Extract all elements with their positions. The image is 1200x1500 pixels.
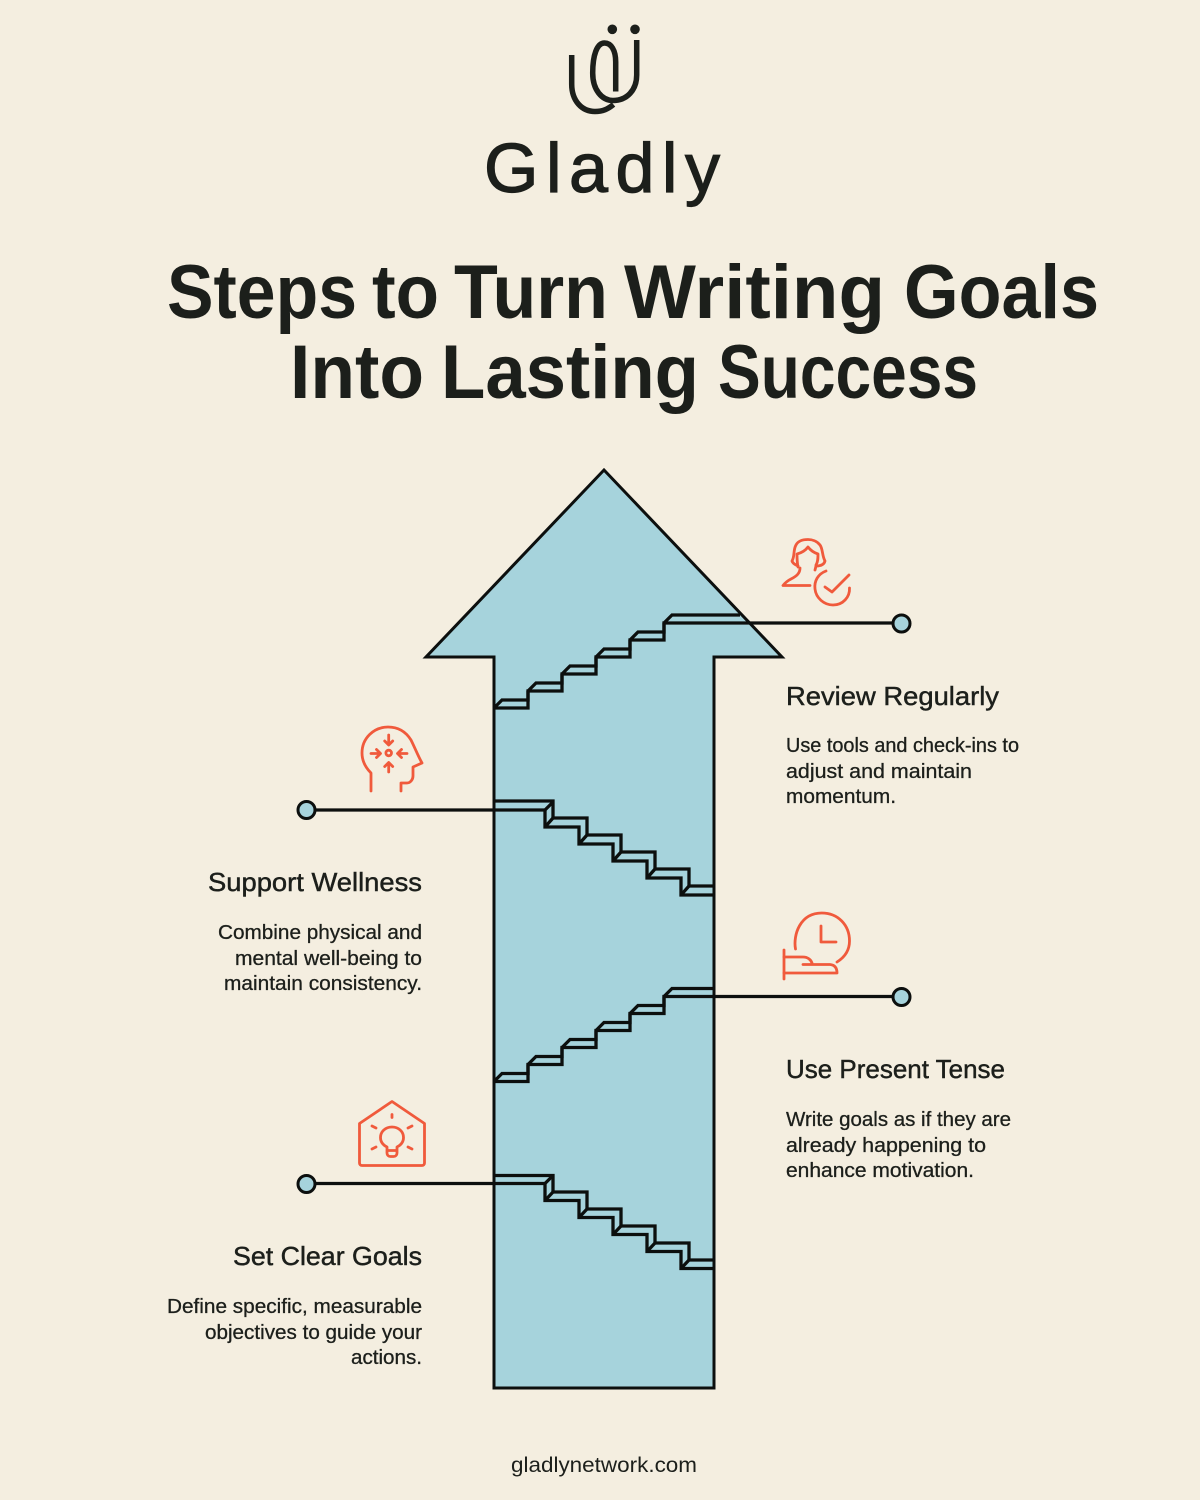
title: Into bbox=[290, 330, 424, 415]
heading: use present tense: Use Present Tense bbox=[786, 1054, 1005, 1084]
icon: house with light bulb bbox=[360, 1102, 424, 1166]
heading: set clear goals: Set Clear Goals bbox=[233, 1241, 422, 1271]
staircase: set clear goals bbox=[315, 1176, 714, 1268]
text: review regularly bbox=[786, 734, 1019, 808]
staircase: use present tense bbox=[494, 988, 893, 1082]
icon: head with focus arrows bbox=[362, 727, 422, 791]
title: Steps bbox=[167, 250, 357, 335]
text: support wellness bbox=[218, 921, 422, 995]
text: set clear goals: actions. bbox=[351, 1346, 422, 1369]
text: review regularly: momentum. bbox=[786, 785, 896, 808]
text: review regularly: Use tools and check-ins to bbox=[786, 734, 1019, 757]
title: Lasting bbox=[441, 330, 699, 415]
staircase: review regularly bbox=[494, 615, 893, 708]
icon: person with check mark bbox=[783, 540, 850, 605]
title bbox=[167, 250, 1099, 415]
heading: review regularly: Review Regularly bbox=[786, 681, 999, 711]
title: Success bbox=[718, 330, 978, 415]
text: set clear goals: Define specific, measurable bbox=[167, 1295, 422, 1318]
connector dot: support wellness bbox=[298, 802, 315, 818]
title: to bbox=[372, 250, 439, 335]
text: support wellness: mental well-being to bbox=[235, 947, 422, 970]
upward arrow bbox=[426, 470, 782, 1388]
text: set clear goals: objectives to guide your bbox=[205, 1321, 422, 1344]
title: Writing bbox=[624, 250, 885, 335]
text: support wellness: Combine physical and bbox=[218, 921, 422, 944]
heading: support wellness: Support Wellness bbox=[208, 867, 422, 897]
connector dot: use present tense bbox=[893, 988, 910, 1006]
footer url: gladlynetwork.com bbox=[511, 1454, 697, 1477]
text: use present tense: Write goals as if they are bbox=[786, 1108, 1011, 1131]
text: set clear goals bbox=[167, 1295, 422, 1369]
title: Turn bbox=[454, 250, 608, 335]
connector dot: review regularly bbox=[893, 615, 910, 632]
text: review regularly: adjust and maintain bbox=[786, 760, 972, 783]
text: use present tense: already happening to bbox=[786, 1134, 986, 1157]
title: Goals bbox=[904, 250, 1099, 335]
text: use present tense: enhance motivation. bbox=[786, 1159, 974, 1182]
staircase: support wellness bbox=[315, 801, 714, 895]
icon: clock over hand bbox=[784, 913, 850, 979]
text: use present tense bbox=[786, 1108, 1011, 1182]
connector dot: set clear goals bbox=[298, 1176, 315, 1192]
logo mark bbox=[572, 24, 640, 112]
logo wordmark: Gladly bbox=[484, 129, 720, 207]
text: support wellness: maintain consistency. bbox=[224, 972, 422, 995]
